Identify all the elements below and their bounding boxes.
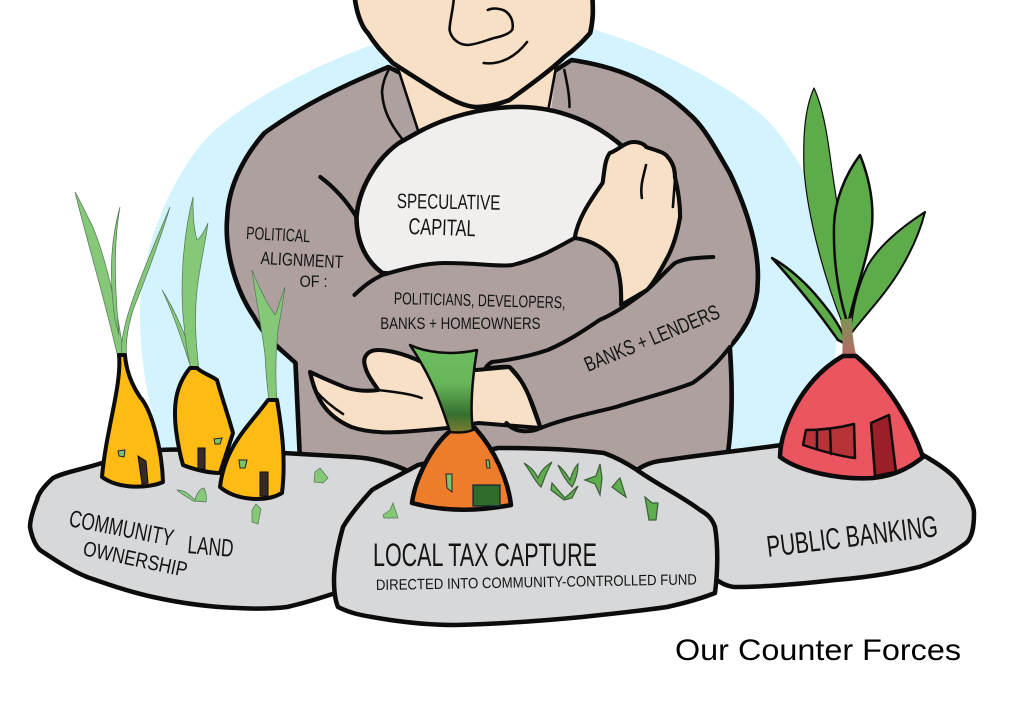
grass tufts [177, 462, 658, 524]
text: politicians, developers, banks and homeowners: POLITICIANS, DEVELOPERS, [394, 288, 566, 312]
mouth [484, 42, 527, 63]
label: public banking: PUBLIC BANKING [765, 510, 940, 564]
forearm outline [486, 257, 730, 428]
body [412, 428, 511, 510]
ground: community land ownership [30, 449, 410, 609]
speculative capital egg [356, 107, 623, 280]
leaves [75, 192, 170, 368]
text: political alignment [246, 222, 344, 291]
ground: local tax capture [334, 448, 717, 625]
neck [398, 60, 557, 136]
torso [227, 60, 758, 475]
leaves [162, 197, 208, 372]
leaves [772, 88, 925, 345]
text: politicians, developers, banks and homeowners: BANKS + HOMEOWNERS [380, 313, 541, 333]
text: political alignment: OF : [300, 271, 328, 291]
label: community land ownership: OWNERSHIP [81, 537, 189, 582]
text: politicians, developers, banks and homeowners [380, 288, 566, 333]
body [102, 355, 163, 487]
upper hand [575, 142, 680, 305]
door and window [118, 450, 148, 484]
nose [450, 0, 513, 45]
window panes [817, 429, 831, 454]
stem [840, 318, 857, 358]
label: local tax capture: LOCAL TAX CAPTURE [373, 537, 597, 573]
windows [446, 460, 490, 492]
carrot house 3 back [162, 197, 233, 473]
text: political alignment: POLITICAL [246, 222, 311, 246]
ground: public banking [637, 445, 974, 587]
body [220, 400, 284, 499]
lower hand [310, 350, 541, 432]
text: speculative capital: CAPITAL [408, 213, 476, 241]
local tax capture carrot house [410, 345, 511, 510]
finger lines [641, 165, 675, 207]
person hugging speculative capital [227, 0, 758, 475]
head [354, 0, 593, 107]
community land carrots [75, 192, 285, 499]
upper arm sleeve [354, 238, 621, 350]
leaves [252, 270, 285, 405]
cuff [506, 423, 541, 431]
door and window [239, 460, 268, 496]
public banking carrot house [772, 88, 925, 478]
forearm sleeve [486, 257, 753, 428]
label: community land ownership: LAND [186, 531, 235, 563]
caption: Our Counter Forces [675, 634, 961, 667]
body [780, 356, 923, 478]
door [871, 415, 896, 476]
text: banks and lenders: BANKS + LENDERS [581, 300, 723, 377]
body [175, 368, 233, 473]
text: speculative capital [397, 189, 501, 241]
collar [382, 67, 569, 140]
palm crease [315, 390, 422, 414]
carrot house 2 front [220, 270, 285, 499]
leaf [410, 345, 477, 433]
carrot house 1 [75, 192, 170, 487]
upper arm sleeve outline [354, 238, 621, 305]
text: political alignment: ALIGNMENT [260, 247, 344, 272]
label: directed into community-controlled fund: DIRECTED INTO COMMUNITY-CONTROLLED FUND [376, 571, 697, 594]
sleeve fold [320, 177, 356, 217]
label: community land ownership: COMMUNITY [67, 505, 176, 552]
door [473, 485, 500, 506]
label: community land ownership [67, 505, 235, 582]
window [803, 424, 855, 458]
background circle [140, 18, 838, 470]
door and window [198, 438, 222, 469]
text: speculative capital: SPECULATIVE [397, 189, 501, 215]
